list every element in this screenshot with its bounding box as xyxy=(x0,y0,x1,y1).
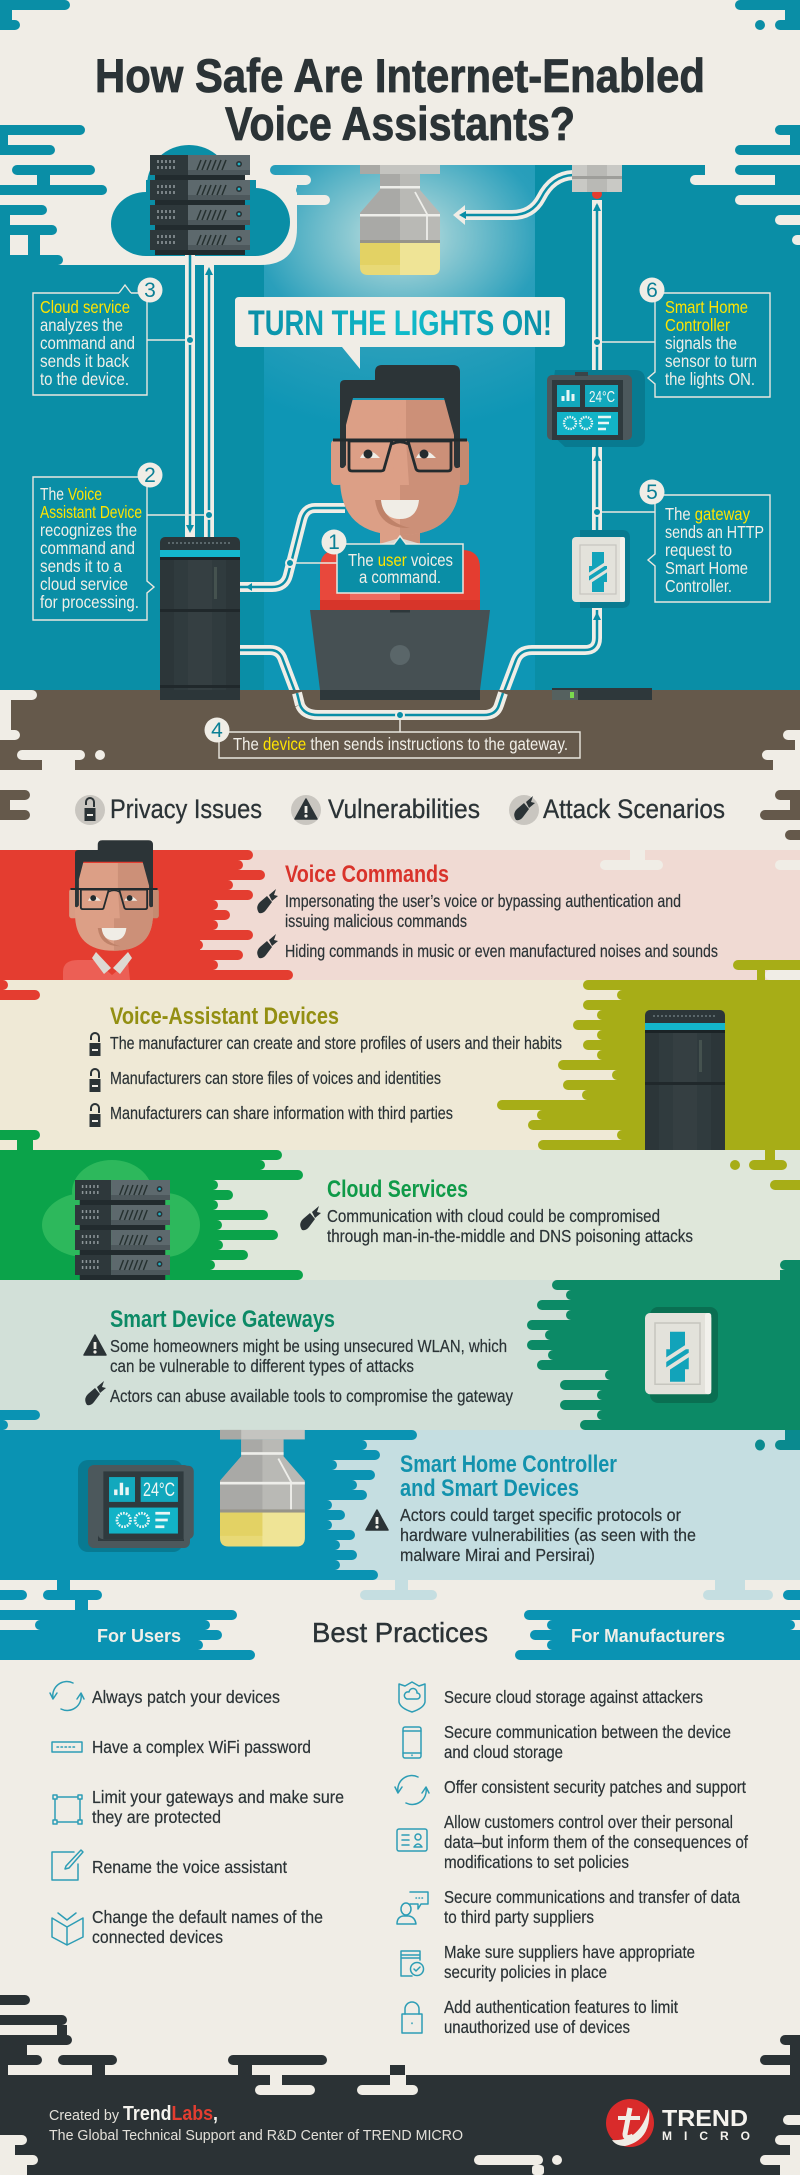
speaker and laptop feet xyxy=(160,690,503,715)
title xyxy=(95,49,705,150)
icon: attack xyxy=(257,889,278,913)
callout 6: smart home controller: the lights ON. xyxy=(665,369,755,389)
callout 5: gateway: Controller. xyxy=(665,576,732,596)
text: authentication: unauthorized use of devices xyxy=(444,2017,630,2037)
callout 3: cloud service: 3 xyxy=(144,279,156,302)
text: policies: Make sure suppliers have appropriate xyxy=(444,1942,695,1962)
text: cloud: through man-in-the-middle and DNS poisoning attacks xyxy=(327,1226,693,1246)
top corner decoration left xyxy=(0,5,65,25)
icon: attack xyxy=(257,934,278,958)
callout 1: user: 1 xyxy=(328,531,340,554)
callout 2: voice assistant device: recognizes the xyxy=(40,520,137,540)
speech bubble: TURN THE LIGHTS ON! xyxy=(248,304,552,343)
figure: user at laptop xyxy=(310,365,490,700)
wires: cloud and device xyxy=(186,252,213,537)
title: How Safe Are Internet-Enabled xyxy=(95,49,705,102)
banner: for manufacturers: For Manufacturers xyxy=(571,1625,725,1646)
callout 3: cloud service: to the device. xyxy=(40,369,129,389)
text: personal data: modifications to set policies xyxy=(444,1852,629,1872)
text: protocols: hardware vulnerabilities (as seen with the xyxy=(400,1525,696,1545)
callout 3: cloud service: command and xyxy=(40,333,135,353)
text: authentication xyxy=(444,1997,678,2037)
text: protocols: Actors could target specific protocols or xyxy=(400,1505,681,1525)
heading: voice commands: Voice Commands xyxy=(285,861,449,888)
panel: voice-assistant devices xyxy=(0,965,800,1173)
floor decoration xyxy=(0,695,800,770)
text: cloud: Communication with cloud could be compromised xyxy=(327,1206,660,1226)
callout 6: smart home controller: 6 xyxy=(646,279,658,302)
top corner decoration right xyxy=(740,5,800,30)
icon: phone xyxy=(403,1727,421,1758)
icon: voice assistant device xyxy=(160,537,240,700)
icon: sync xyxy=(50,1682,84,1710)
icon: smart home controller xyxy=(547,372,632,440)
callout 5: gateway: 5 xyxy=(646,481,658,504)
icon: sync xyxy=(395,1776,429,1804)
legend: vulnerabilities: Vulnerabilities xyxy=(328,794,480,824)
credit text xyxy=(49,2103,463,2144)
callout 4: device: 4 xyxy=(211,719,223,742)
icon: shield xyxy=(399,1682,425,1712)
callout 4: device xyxy=(204,711,580,758)
icon: user and speech bubble xyxy=(397,1892,428,1924)
text: unsecured wlan: can be vulnerable to different types of attacks xyxy=(110,1356,414,1376)
text: unsecured wlan: Some homeowners might be using unsecured WLAN, which xyxy=(110,1336,507,1356)
credit text: Created by xyxy=(49,2107,119,2124)
callout 2: voice assistant device: command and xyxy=(40,538,135,558)
left side decoration xyxy=(0,125,325,265)
text: policies: security policies in place xyxy=(444,1962,607,1982)
icon: privacy xyxy=(90,1033,100,1056)
text: policies xyxy=(444,1942,695,1982)
panel: smart home controller and smart devices xyxy=(0,1430,800,1580)
text: wifi password: Have a complex WiFi password xyxy=(92,1737,311,1757)
text: voices: Manufacturers can store files of voices and identities xyxy=(110,1068,441,1088)
text: default names xyxy=(92,1907,323,1947)
icon: vulnerability xyxy=(84,1335,106,1355)
text: default names: Change the default names of the xyxy=(92,1907,323,1927)
credit text: TrendLabs, xyxy=(123,2103,218,2125)
text: rename: Rename the voice assistant xyxy=(92,1857,287,1877)
text: impersonating: issuing malicious commands xyxy=(285,911,467,931)
panel: cloud services xyxy=(0,1135,800,1280)
icon: servers xyxy=(75,1180,170,1280)
text: personal data: data–but inform them of the consequences of xyxy=(444,1832,748,1852)
icon: smart home controller xyxy=(78,1460,194,1552)
icon: router xyxy=(552,688,652,700)
banner: for users: For Users xyxy=(97,1625,181,1646)
best practices header decoration xyxy=(0,1580,800,1610)
footer xyxy=(0,2000,800,2175)
heading: cloud services: Cloud Services xyxy=(327,1176,468,1203)
icon: smart home controller: 24°C xyxy=(143,1480,175,1501)
wire: sensor, controller, gateway xyxy=(593,200,601,537)
speech bubble xyxy=(235,297,565,369)
callout 2: voice assistant device: Assistant Device xyxy=(40,502,142,522)
icon: lock xyxy=(402,2002,422,2033)
text: third party: to third party suppliers xyxy=(444,1907,594,1927)
banner: for manufacturers xyxy=(520,1615,800,1655)
heading: voice-assistant devices: Voice-Assistant Devices xyxy=(110,1003,339,1030)
icon: voice assistant device xyxy=(645,1010,725,1173)
banner: for users xyxy=(0,1615,250,1655)
text: cloud storage: Secure cloud storage against attackers xyxy=(444,1687,703,1707)
callout 3: cloud service: Cloud service xyxy=(40,297,130,317)
legend: attack scenarios: Attack Scenarios xyxy=(543,794,725,824)
heading: smart home controller and smart devices: Smart Home Controller xyxy=(400,1451,617,1478)
callout 5: gateway: The gateway xyxy=(665,504,750,524)
callout 5: gateway: sends an HTTP xyxy=(665,522,764,542)
icon: gateway xyxy=(572,530,630,608)
callout 4: device: The device then sends instructions to the gateway. xyxy=(233,734,568,754)
logo: trend micro xyxy=(606,2099,750,2147)
legend xyxy=(75,794,725,825)
callout 6: smart home controller: sensor to turn xyxy=(665,351,757,371)
icon: sensor xyxy=(572,165,622,199)
panel: smart device gateways xyxy=(0,1265,800,1430)
heading: best practices: Best Practices xyxy=(312,1617,488,1648)
panel: best practices for manufacturers xyxy=(395,1682,748,2037)
callout 2: voice assistant device: The Voice xyxy=(40,484,102,504)
icon: note and pencil xyxy=(52,1850,83,1880)
text: patch: Always patch your devices xyxy=(92,1687,280,1707)
footer decoration xyxy=(0,2000,800,2175)
icon: gateway xyxy=(645,1307,718,1403)
icon: attack xyxy=(300,1206,321,1230)
text: gateways xyxy=(92,1787,344,1827)
callout 6: smart home controller: Smart Home xyxy=(665,297,748,317)
callout 2: voice assistant device: 2 xyxy=(144,464,156,487)
floor xyxy=(0,690,800,770)
icon: light bulb xyxy=(220,1430,305,1546)
text: patches: Offer consistent security patches and support xyxy=(444,1777,746,1797)
icon: controller shadow xyxy=(547,370,645,447)
callout 3: cloud service xyxy=(33,278,194,395)
text: gateways: they are protected xyxy=(92,1807,221,1827)
icon: cloud xyxy=(42,1160,200,1257)
callout 3: cloud service: sends it back xyxy=(40,351,129,371)
heading: smart home controller and smart devices: and Smart Devices xyxy=(400,1475,579,1502)
callout 1: user xyxy=(286,530,463,593)
text: authentication: Add authentication features to limit xyxy=(444,1997,678,2017)
text: impersonating xyxy=(285,891,681,931)
logo: trend micro: MICRO xyxy=(662,2129,750,2143)
panel: voice commands xyxy=(0,840,800,980)
text: impersonating: Impersonating the user’s voice or bypassing authentication and xyxy=(285,891,681,911)
wire: sensor to bulb xyxy=(453,175,573,225)
text: protocols xyxy=(400,1505,696,1565)
callout 5: gateway xyxy=(593,480,770,602)
wire: user to device xyxy=(240,508,345,591)
icon: policy document xyxy=(401,1951,424,1976)
text: personal data xyxy=(444,1812,748,1872)
callout 6: smart home controller: Controller xyxy=(665,315,730,335)
text: communication: Secure communication between the device xyxy=(444,1722,731,1742)
callout 3: cloud service: analyzes the xyxy=(40,315,123,335)
text: third party: Secure communications and transfer of data xyxy=(444,1887,740,1907)
text: abuse tools: Actors can abuse available tools to compromise the gateway xyxy=(110,1386,513,1406)
scene background xyxy=(0,130,800,690)
text: cloud xyxy=(327,1206,693,1246)
brown decoration under floor xyxy=(0,795,800,835)
callout 5: gateway: request to xyxy=(665,540,732,560)
wire: device to gateway xyxy=(240,600,601,715)
icon: privacy xyxy=(90,1069,100,1092)
callout 5: gateway: Smart Home xyxy=(665,558,748,578)
callout 2: voice assistant device xyxy=(33,462,213,620)
figure: user portrait xyxy=(63,840,159,980)
panel: best practices for users xyxy=(50,1682,344,1947)
callout 1: user: a command. xyxy=(359,567,441,587)
title: Voice Assistants? xyxy=(225,97,575,150)
text: third parties: Manufacturers can share information with third parties xyxy=(110,1103,453,1123)
text: third party xyxy=(444,1887,740,1927)
text: unsecured wlan xyxy=(110,1336,507,1376)
icon: password xyxy=(52,1742,82,1752)
callout 6: smart home controller: signals the xyxy=(665,333,737,353)
icon: id card xyxy=(397,1829,427,1851)
icon: privacy xyxy=(90,1104,100,1127)
heading: smart device gateways: Smart Device Gateways xyxy=(110,1306,335,1333)
icon: light bulb xyxy=(360,165,440,275)
text: gateways: Limit your gateways and make sure xyxy=(92,1787,344,1807)
icon: smart home controller: 24°C xyxy=(589,389,615,406)
logo: trend micro: TREND xyxy=(662,2105,748,2131)
credit text: The Global Technical Support and R&D Center of TREND MICRO xyxy=(49,2127,463,2144)
text: protocols: malware Mirai and Persirai) xyxy=(400,1545,595,1565)
icon: vulnerability xyxy=(366,1510,388,1530)
text: personal data: Allow customers control over their personal xyxy=(444,1812,733,1832)
text: communication xyxy=(444,1722,731,1762)
icon: gateway square xyxy=(53,1795,82,1824)
callout 2: voice assistant device: for processing. xyxy=(40,592,139,612)
heading: smart home controller and smart devices xyxy=(400,1451,617,1502)
legend: privacy issues: Privacy Issues xyxy=(110,794,262,824)
panel: smart home scene xyxy=(0,125,800,770)
callout 2: voice assistant device: cloud service xyxy=(40,574,128,594)
text: communication: and cloud storage xyxy=(444,1742,563,1762)
text: profiles: The manufacturer can create and store profiles of users and their habits xyxy=(110,1033,562,1053)
icon: book xyxy=(52,1913,83,1945)
callout 6: smart home controller xyxy=(593,278,770,397)
icon: cloud servers xyxy=(150,155,250,255)
icon: cloud xyxy=(111,145,290,256)
icon: attack xyxy=(85,1381,106,1405)
callout 2: voice assistant device: sends it to a xyxy=(40,556,122,576)
callout 1: user: The user voices xyxy=(348,550,453,570)
text: default names: connected devices xyxy=(92,1927,223,1947)
